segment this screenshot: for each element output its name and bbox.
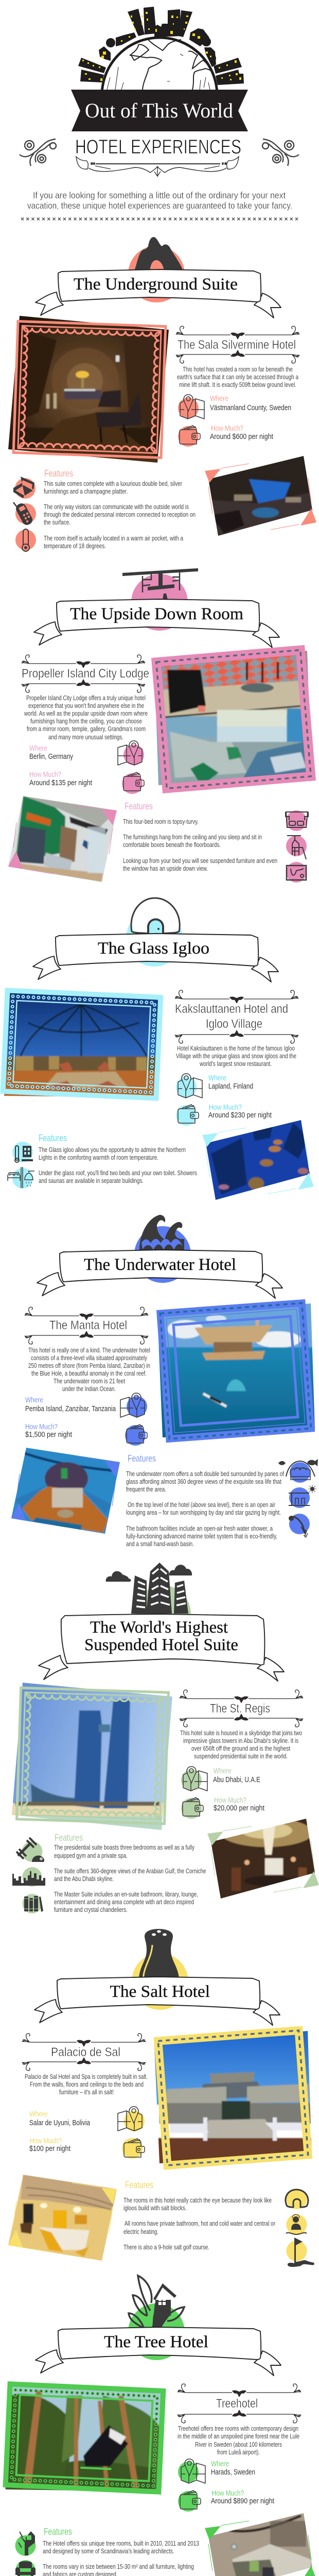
hotel name bbox=[180, 1690, 303, 1727]
feature text: bathroom: electric heating. bbox=[123, 2228, 158, 2235]
feature text: furnishings: comfortable boxes beneath the floorboards. bbox=[123, 841, 221, 849]
feature text: view bbox=[123, 857, 277, 872]
feature text: igloos: igloos build with salt blocks. bbox=[123, 2205, 187, 2212]
feature text: topsy-turvy: This four-bed room is topsy-turvy. bbox=[123, 818, 199, 825]
where: Salar de Uyuni, Bolivia bbox=[29, 2119, 91, 2127]
divider: cross stitch row: ××××××××××××××××××××××××××××××××××××××××××××××××××××× bbox=[21, 215, 298, 223]
description: 250 metres off shore (from Pemba Island, Zanzibar) in bbox=[28, 1362, 150, 1369]
description: under the Indian Ocean. bbox=[62, 1385, 116, 1393]
how much: Around $890 per night bbox=[211, 2497, 274, 2505]
heading banner: The Salt Hotel bbox=[110, 1982, 210, 2001]
how much: Around $600 per night bbox=[210, 433, 273, 441]
feature text: glass roof bbox=[39, 1170, 197, 1184]
feature text: bathroom: fully-functioning advanced marine toilet system that is eco-friendly, bbox=[126, 1533, 277, 1540]
features: Features bbox=[125, 2180, 153, 2190]
icon: bed and shower bbox=[8, 1167, 34, 1189]
features: Features bbox=[125, 801, 153, 811]
description: Propeller Island City Lodge offers a truly unique hotel bbox=[26, 694, 146, 702]
feature text: view: Looking up from your bed you will see suspended furniture and even bbox=[123, 857, 277, 865]
icon: thermometer and aurora window bbox=[12, 1142, 33, 1162]
how much: $1,500 per night bbox=[25, 1431, 72, 1439]
icon: spa figure bbox=[286, 2214, 307, 2235]
ornament: right swirl bbox=[262, 139, 299, 166]
icon: upside down picture bbox=[286, 862, 307, 883]
header bbox=[20, 7, 299, 223]
where bbox=[178, 394, 291, 419]
how much: How Much? bbox=[29, 770, 61, 779]
heading banner: The Underwater Hotel bbox=[84, 1256, 236, 1274]
heading banner: The Glass Igloo bbox=[98, 939, 209, 958]
photo: cave suite with scalloped frame bbox=[8, 316, 169, 463]
where: Berlin, Germany bbox=[29, 753, 74, 761]
feature text: open air lounge: lounging area – for sun worshipping by day and star gazing by night. bbox=[126, 1509, 281, 1516]
icon: thermometer bbox=[15, 529, 36, 551]
features: Features bbox=[44, 2527, 72, 2537]
heading banner bbox=[34, 599, 279, 648]
feature text: intercom: The only way visitors can communicate with the outside world is bbox=[44, 503, 189, 511]
feature text: bathroom: The bathroom facilities include an open-air fresh water shower, a bbox=[126, 1525, 273, 1532]
where bbox=[29, 741, 144, 765]
feature text: igloos: The rooms in this hotel really catch the eye because they look like bbox=[123, 2197, 272, 2204]
icon: salt shaker bbox=[132, 1929, 188, 2010]
feature text: northern lights bbox=[39, 1146, 186, 1161]
hotel name: Palacio de Sal bbox=[51, 2045, 120, 2059]
where: Where bbox=[214, 1767, 232, 1775]
description bbox=[178, 2425, 299, 2456]
feature text: bedrooms: The presidential suite boasts three bedrooms as well as a fully bbox=[54, 1844, 195, 1851]
feature text: master suite bbox=[54, 1891, 198, 1913]
feature text: double bed: glass affording almost 360 degree views of the exquisite sea life that bbox=[126, 1478, 281, 1485]
features: Features bbox=[44, 468, 73, 479]
where: Where bbox=[29, 744, 47, 753]
where: Where bbox=[210, 394, 228, 403]
feature text: room size: The rooms vary in size between 15-30 m² and all furniture, lighting bbox=[43, 2563, 194, 2570]
icon: bed under glass with fish bbox=[278, 1459, 318, 1483]
heading banner bbox=[37, 1250, 282, 1298]
feature text: furnishings bbox=[123, 834, 262, 849]
photo: glass igloo interior bbox=[0, 989, 165, 1101]
feature text: bedrooms bbox=[54, 1844, 195, 1859]
feature text: bedrooms: equipped gym and a private spa. bbox=[54, 1852, 128, 1859]
where bbox=[29, 2107, 145, 2131]
hotel name: The Sala Silvermine Hotel bbox=[178, 338, 296, 352]
description: from Luleå airport). bbox=[217, 2449, 260, 2456]
where bbox=[176, 1074, 253, 1098]
photo: manta resort floating room bbox=[154, 1301, 319, 1443]
icon: box bed bbox=[286, 810, 308, 831]
features bbox=[12, 1833, 206, 1913]
feature text: tree rooms: The Hotel offers six unique tree rooms, built in 2010, 2011 and 2013 bbox=[43, 2540, 199, 2547]
icon: golf flag bbox=[286, 2238, 314, 2267]
feature text: open air lounge bbox=[126, 1501, 281, 1516]
hotel name: Kakslauttanen Hotel and bbox=[175, 1002, 288, 1016]
where bbox=[181, 1767, 260, 1791]
how much: How Much? bbox=[212, 2489, 244, 2498]
subtitle: hotel experiences: HOTEL EXPERIENCES bbox=[75, 136, 241, 158]
illustration: globe with city skyline bbox=[78, 7, 244, 90]
feature text: temperature bbox=[44, 535, 183, 550]
where: Lapland, Finland bbox=[208, 1082, 253, 1091]
how much bbox=[29, 2137, 145, 2159]
hotel name: The St. Regis bbox=[210, 1702, 270, 1716]
feature text: master suite: entertainment and dining area complete with art deco inspired bbox=[54, 1899, 194, 1906]
description: from a mirror room, temple, gallery, Grandma's room bbox=[27, 725, 146, 733]
feature text: furnishings: The furnishings hang from the ceiling and you sleep and sit in bbox=[123, 834, 262, 841]
feature text: double bed bbox=[126, 1470, 284, 1493]
icon: tree house bbox=[128, 2276, 185, 2360]
where: Where bbox=[25, 1396, 43, 1404]
how much bbox=[181, 1796, 264, 1819]
description: and many more unusual settings. bbox=[48, 734, 123, 741]
photo: presidential suite dining room bbox=[207, 1819, 319, 1899]
hotel name: The Manta Hotel bbox=[49, 1318, 127, 1332]
section: The Salt Hotel bbox=[3, 1929, 316, 2267]
hotel name bbox=[22, 2033, 146, 2071]
photo: treehotel cabin in forest bbox=[3, 2383, 167, 2496]
icon: open air deck and sun bbox=[289, 1485, 316, 1508]
how much bbox=[178, 2489, 274, 2512]
features bbox=[123, 2180, 314, 2267]
where bbox=[178, 2459, 255, 2483]
how much: How Much? bbox=[209, 1103, 242, 1112]
icon: dumbbell and spa flower bbox=[16, 1838, 44, 1862]
where: Where bbox=[29, 2110, 48, 2119]
feature text: igloos bbox=[123, 2197, 272, 2212]
heading banner bbox=[36, 269, 281, 318]
icon: sofa bbox=[15, 2560, 36, 2576]
photo: treehotel room interior bbox=[203, 2511, 319, 2576]
photo: hotel storefront bbox=[8, 796, 117, 882]
feature text: double bed: frequent the area. bbox=[126, 1486, 166, 1493]
icon: phone bbox=[13, 502, 36, 527]
how much: How Much? bbox=[214, 1796, 246, 1805]
feature text: bed: This suite comes complete with a luxurious double bed, silver bbox=[44, 480, 182, 487]
heading banner: The Underground Suite bbox=[74, 275, 238, 294]
features bbox=[126, 1453, 318, 1548]
how much: Around $230 per night bbox=[208, 1111, 272, 1120]
feature text: open air lounge: On the top level of the hotel (above sea level), there is an open air bbox=[128, 1501, 275, 1509]
feature text: northern lights: The Glass igloo allows you the opportunity to admire the Northern bbox=[39, 1146, 186, 1154]
feature text: bed bbox=[44, 480, 182, 495]
features: Features bbox=[39, 1133, 67, 1143]
intro text: If you are looking for something a little out of the ordinary for your next bbox=[33, 190, 286, 200]
hotel name: Treehotel bbox=[216, 2397, 258, 2411]
feature text: views bbox=[54, 1868, 206, 1883]
how much bbox=[176, 1103, 272, 1126]
features: Features bbox=[128, 1453, 156, 1464]
description bbox=[24, 694, 148, 741]
hotel name bbox=[25, 1307, 148, 1344]
description: From the walls, floors and ceilings to the beds and bbox=[30, 2081, 144, 2088]
heading banner bbox=[34, 1977, 280, 2025]
section: The World's Highest Suspended Hotel Suite bbox=[10, 1563, 319, 1913]
description: world's largest snow restaurant. bbox=[199, 1060, 272, 1067]
where: Where bbox=[211, 2460, 229, 2468]
features bbox=[123, 801, 308, 883]
hotel name bbox=[178, 2384, 301, 2423]
feature text: bed: furnishings and a champagne platter. bbox=[44, 488, 128, 495]
description bbox=[177, 366, 298, 388]
feature text: temperature: The room itself is actually located in a warm air pocket, with a bbox=[44, 535, 183, 542]
hotel name: Igloo Village bbox=[206, 1017, 262, 1031]
description: The underwater room is 21 feet bbox=[54, 1378, 125, 1385]
icon: tree house small bbox=[15, 2531, 36, 2556]
photo: cave terrace bbox=[205, 456, 316, 536]
description bbox=[176, 1045, 296, 1067]
icon: salt igloo bbox=[286, 2189, 308, 2209]
icon: skyline bbox=[12, 1867, 45, 1887]
description: furnishings hang from the ceiling, you can choose bbox=[30, 718, 142, 725]
how much bbox=[25, 1422, 147, 1446]
heading banner bbox=[33, 934, 278, 982]
description: furniture – it's all in salt! bbox=[59, 2089, 114, 2096]
where: Västmanland County, Sweden bbox=[210, 404, 291, 412]
features: Features bbox=[55, 1833, 83, 1843]
description: experience that you won't find anywhere else in the bbox=[28, 702, 144, 709]
section: The Glass Igloo bbox=[0, 898, 319, 1205]
feature text: bathroom bbox=[126, 1525, 277, 1548]
icon: hanging chair bbox=[286, 836, 307, 859]
feature text: intercom bbox=[44, 503, 196, 526]
description: world. As well as the popular upside down room where bbox=[24, 710, 148, 717]
where: Abu Dhabi, U.A.E bbox=[213, 1776, 260, 1784]
feature text: views: and the Abu Dhabi skyline. bbox=[54, 1875, 114, 1883]
ornament: subtitle underline bbox=[76, 157, 239, 176]
feature text: golf: There is also a 9-hole salt golf course. bbox=[123, 2244, 209, 2251]
photo: Palacio de Sal exterior bbox=[152, 2027, 316, 2166]
feature text: glass roof: and saunas are available in separate buildings. bbox=[39, 1177, 144, 1184]
icon: mountain cave bbox=[128, 237, 185, 302]
where bbox=[25, 1393, 147, 1417]
description: River in Sweden (about 100 kilometers bbox=[195, 2441, 282, 2448]
description bbox=[25, 2073, 148, 2096]
feature text: master suite: furniture and crystal chandeliers. bbox=[54, 1906, 128, 1913]
where: Pemba Island, Zanzibar, Tanzania bbox=[25, 1405, 116, 1413]
icon: igloo bbox=[126, 898, 183, 967]
description: This hotel is really one of a kind. The underwater hotel bbox=[28, 1347, 150, 1354]
heading banner: The World's Highest bbox=[90, 1618, 228, 1637]
how much: How Much? bbox=[25, 1422, 58, 1431]
description: suspended presidential suite in the world. bbox=[194, 1753, 288, 1760]
section: The Tree Hotel bbox=[3, 2276, 319, 2576]
icon: towers and clouds bbox=[106, 1563, 192, 1642]
description bbox=[28, 1347, 150, 1393]
how much: $20,000 per night bbox=[214, 1804, 264, 1812]
feature text: bathroom: and a small hand-wash basin. bbox=[126, 1540, 194, 1548]
feature text: views: The suite offers 360-degree views of the Arabian Gulf, the Corniche bbox=[54, 1868, 206, 1875]
description: Palacio de Sal Hotel and Spa is completely built in salt. bbox=[25, 2073, 148, 2080]
description: over 656ft off the ground and is the highest bbox=[191, 1745, 290, 1752]
description: This hotel has created a room so far beneath the bbox=[183, 366, 293, 373]
feature text: northern lights: Lights in the comforting warmth of room temperature. bbox=[39, 1154, 158, 1161]
features bbox=[13, 468, 196, 551]
intro text bbox=[27, 190, 292, 211]
feature text: intercom: through the dedicated personal intercom connected to reception on bbox=[44, 511, 196, 518]
heading banner bbox=[39, 1614, 284, 1681]
feature text: tree rooms: and designed by some of Scandinavia's leading architects. bbox=[43, 2548, 174, 2555]
icon: shower head bbox=[289, 1514, 310, 1538]
title ribbon: Out of This World bbox=[85, 99, 233, 122]
feature text: view: the window has an upside down view. bbox=[123, 865, 208, 872]
section: The Upside Down Room bbox=[3, 568, 319, 889]
feature text: room size bbox=[43, 2563, 194, 2576]
feature text: intercom: the surface. bbox=[44, 519, 70, 526]
hotel name bbox=[176, 326, 299, 363]
photo: St. Regis towers with scalloped frame bbox=[10, 1680, 175, 1837]
description bbox=[180, 1730, 302, 1760]
section: The Underground Suite bbox=[0, 237, 319, 551]
feature text: bathroom: All rooms have private bathroom, hot and cold water and central or bbox=[125, 2220, 275, 2227]
where: Where bbox=[208, 1074, 226, 1082]
icon: books bbox=[23, 1894, 43, 1913]
how much bbox=[178, 424, 273, 447]
hotel name: Propeller Island City Lodge bbox=[22, 667, 149, 681]
hotel name bbox=[22, 655, 149, 692]
section: The Underwater Hotel bbox=[6, 1215, 319, 1548]
features bbox=[15, 2527, 199, 2576]
how much: How Much? bbox=[211, 424, 243, 433]
description: consists of a three-level villa situated approximately bbox=[31, 1354, 148, 1362]
photo: upside down room with dashed frame bbox=[149, 644, 319, 793]
how much: How Much? bbox=[30, 2137, 62, 2145]
feature text: master suite: The Master Suite includes an en-suite bathroom, library, lounge, bbox=[54, 1891, 198, 1898]
feature text: glass roof: Under the glass roof, you'll find two beds and your own toilet. Showers bbox=[39, 1170, 197, 1177]
icon: waves bbox=[134, 1215, 191, 1283]
feature text: bathroom bbox=[123, 2220, 275, 2235]
heading banner: The Upside Down Room bbox=[70, 605, 243, 623]
ornament: left swirl bbox=[20, 139, 56, 166]
icon: bed bbox=[13, 477, 36, 499]
description: the Blue Hole, a beautiful anomaly in the coral reef. bbox=[31, 1370, 147, 1377]
feature text: tree rooms bbox=[43, 2540, 199, 2555]
hotel name bbox=[175, 990, 298, 1043]
how much bbox=[29, 770, 144, 794]
photo: igloos aerial bbox=[202, 1120, 314, 1200]
feature text: temperature: temperature of 18 degrees. bbox=[44, 543, 106, 550]
photo: salt bedroom bbox=[8, 2175, 117, 2261]
where: Harads, Sweden bbox=[211, 2468, 255, 2477]
photo: underwater bedroom tunnel bbox=[11, 1448, 120, 1534]
how much: Around $135 per night bbox=[29, 779, 92, 787]
title ribbon bbox=[71, 90, 248, 131]
features bbox=[8, 1133, 197, 1189]
heading banner: Suspended Hotel Suite bbox=[84, 1636, 238, 1654]
heading banner: The Tree Hotel bbox=[104, 2333, 208, 2351]
how much: $100 per night bbox=[29, 2145, 70, 2153]
icon: upside down table bbox=[122, 568, 198, 631]
heading banner bbox=[36, 2327, 281, 2376]
